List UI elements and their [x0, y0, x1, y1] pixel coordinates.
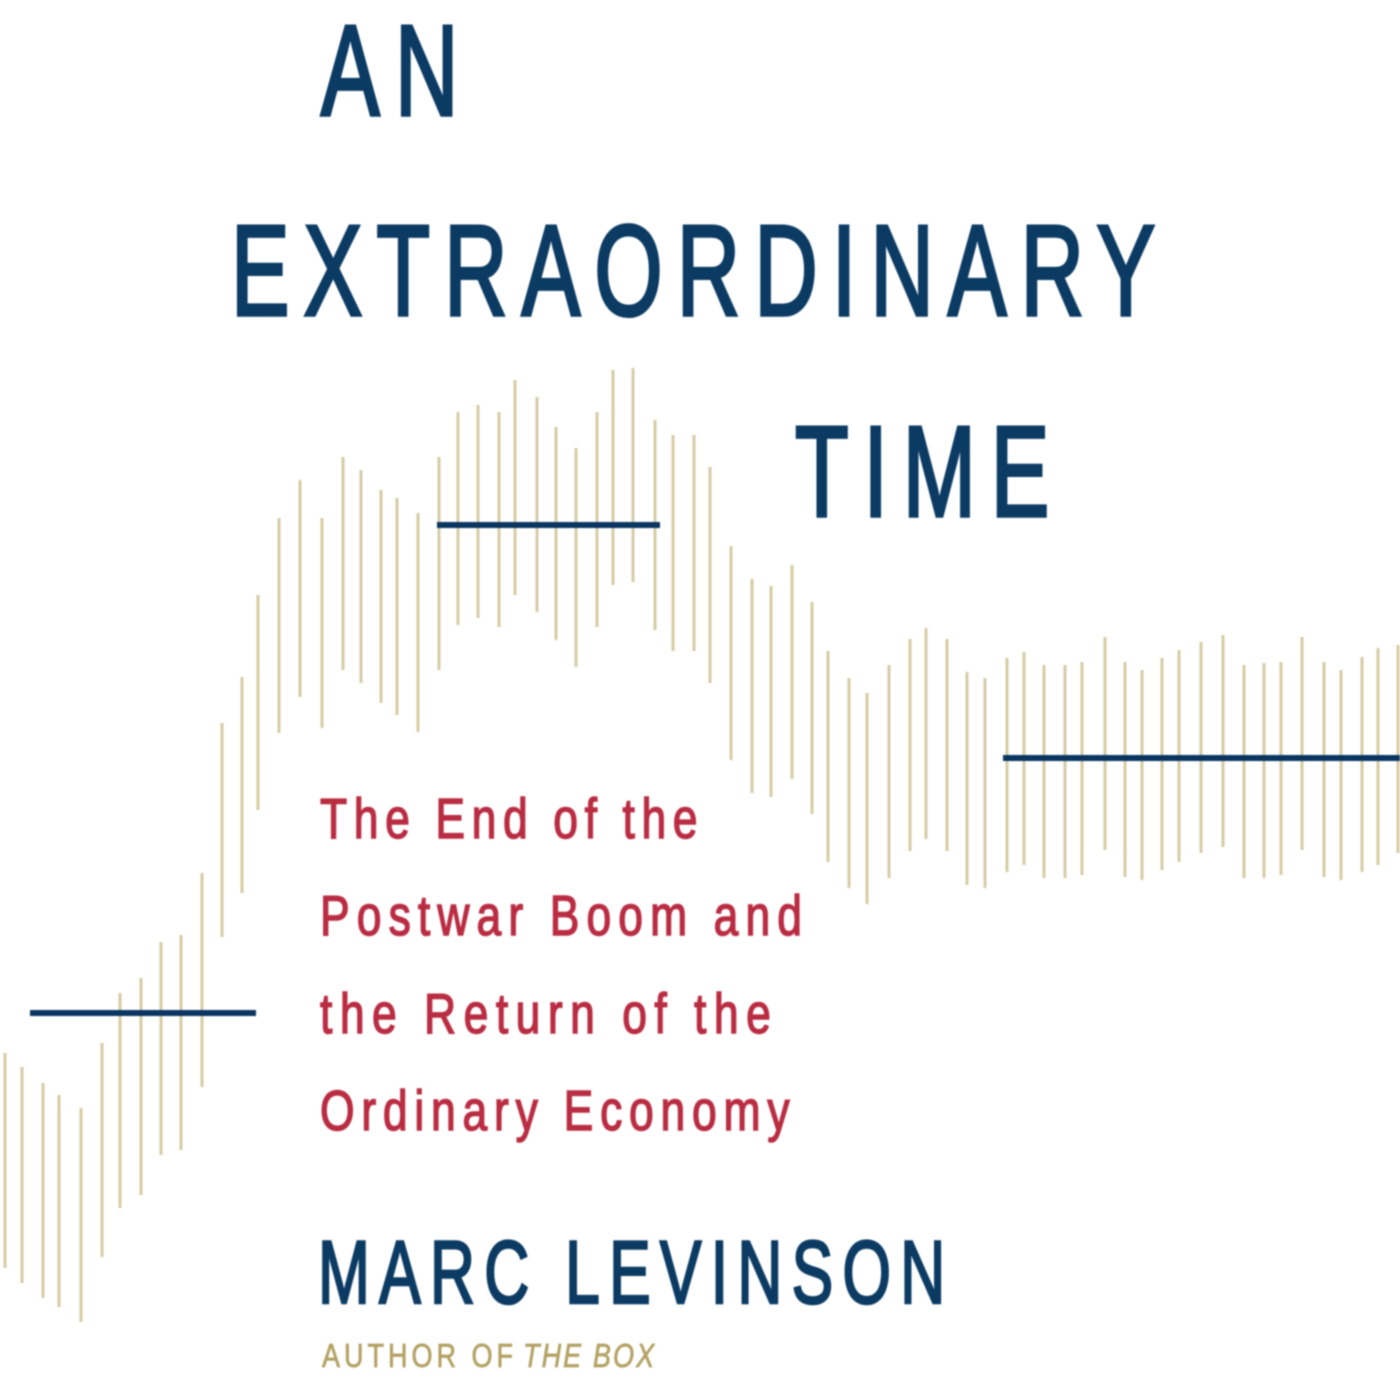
subtitle: Ordinary Economy	[320, 1079, 790, 1142]
marker line: left	[30, 1010, 256, 1016]
author credit: AUTHOR OF	[322, 1339, 513, 1375]
author credit: THE BOX	[523, 1339, 656, 1375]
marker line: middle	[437, 522, 660, 528]
title	[231, 0, 1155, 544]
author name: MARC LEVINSON	[318, 1223, 945, 1323]
title: EXTRAORDINARY	[231, 199, 1155, 343]
title: TIME	[795, 400, 1049, 544]
subtitle: The End of the	[320, 787, 698, 850]
author credit	[322, 1339, 656, 1375]
subtitle: the Return of the	[320, 982, 771, 1045]
subtitle	[320, 787, 802, 1142]
chart: vertical tan bars forming an economic wave	[5, 368, 1398, 1322]
marker line: right	[1003, 755, 1400, 761]
subtitle: Postwar Boom and	[320, 884, 802, 947]
title: AN	[321, 0, 458, 143]
